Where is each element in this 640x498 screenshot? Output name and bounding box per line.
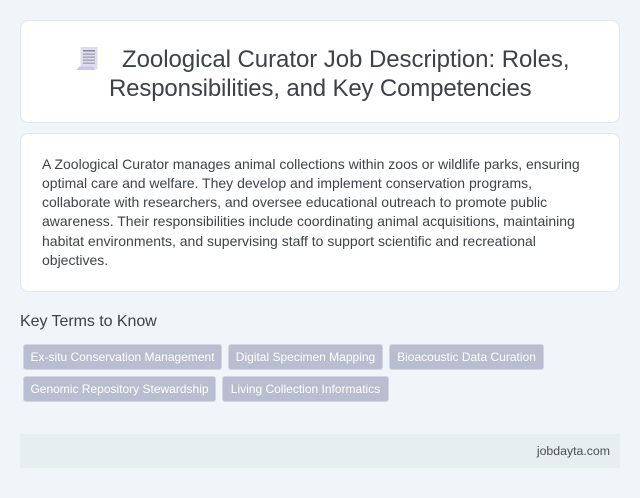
panel: description card [20, 133, 620, 292]
tag [228, 344, 383, 370]
tag [389, 344, 544, 370]
text block: description: habitat environments, and supervising staff to support scientific and recreational [42, 233, 536, 249]
tag [23, 344, 222, 370]
tag [222, 376, 389, 402]
text block: description: objectives. [42, 252, 108, 268]
title: Zoological Curator Job Description: Roles, [122, 46, 569, 73]
tag list [23, 344, 544, 402]
heading: key terms: Key Terms to Know [20, 313, 157, 330]
tag: Living Collection Informatics [231, 382, 380, 396]
tag [23, 376, 216, 402]
text block: description [42, 156, 580, 268]
text block: description: optimal care and welfare. They develop and implement conservation programs, [42, 175, 532, 191]
footer bar [20, 434, 620, 468]
footer text: jobdayta.com [537, 444, 610, 458]
title [109, 46, 569, 102]
tag: Ex-situ Conservation Management [30, 350, 215, 364]
tag: Genomic Repository Stewardship [30, 382, 209, 396]
icon: document scroll [77, 47, 98, 70]
text block: description: A Zoological Curator manages animal collections within zoos or wildlife parks, ensuring [42, 156, 580, 172]
tag: Digital Specimen Mapping [236, 350, 375, 364]
panel: title card [20, 20, 620, 123]
text block: description: awareness. Their responsibilities include coordinating animal acquisitions, maintaining [42, 213, 575, 229]
title: Responsibilities, and Key Competencies [109, 75, 532, 102]
text block: description: collaborate with researchers, and oversee educational outreach to promote public [42, 194, 547, 210]
tag: Bioacoustic Data Curation [397, 350, 536, 364]
